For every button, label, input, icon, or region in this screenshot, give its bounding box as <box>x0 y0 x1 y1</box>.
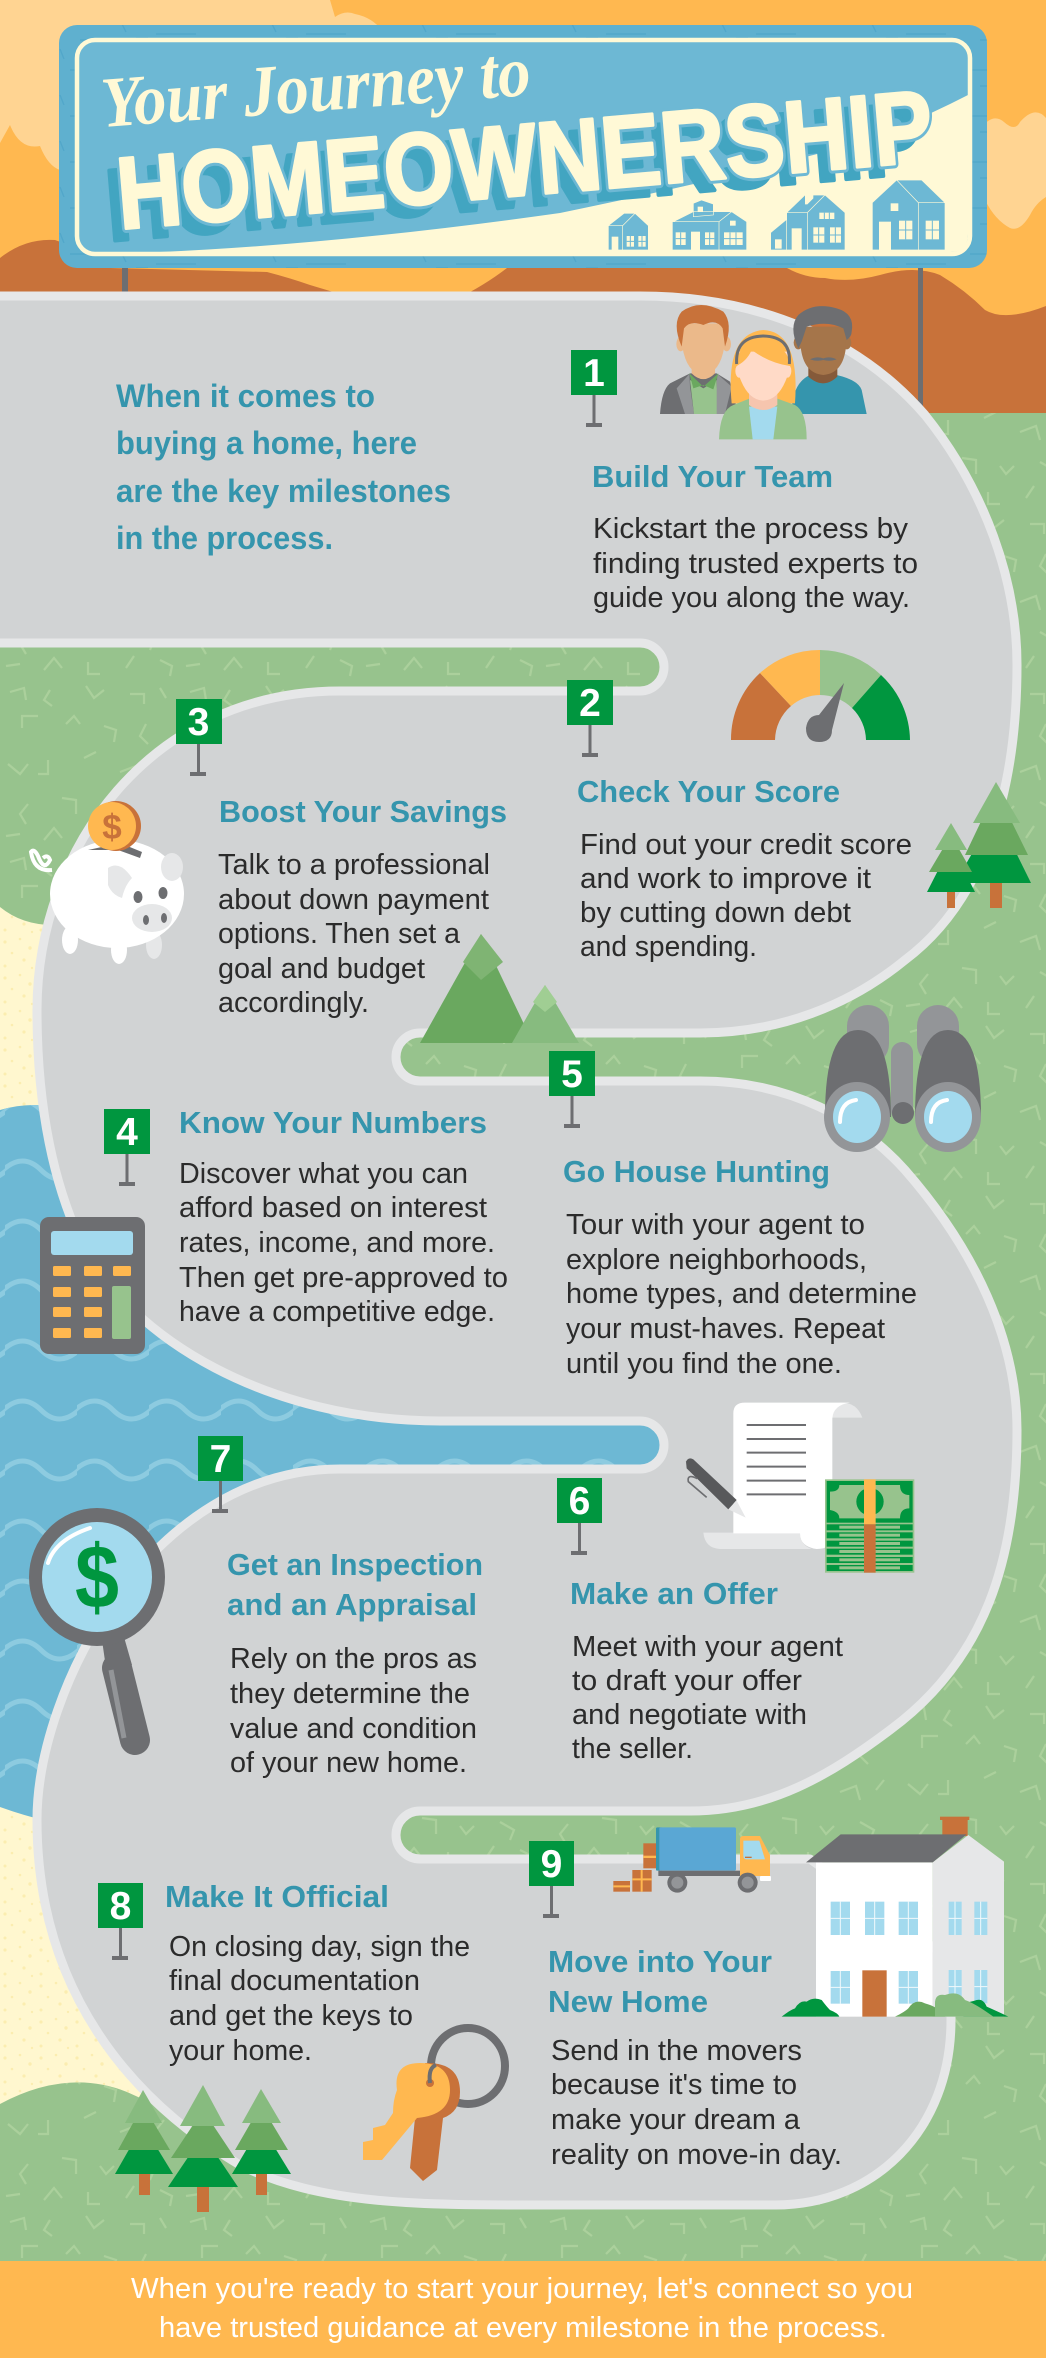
icon: mountains <box>420 934 579 1043</box>
title main word: HOMEOWNERSHIP <box>112 69 937 251</box>
heading: New Home <box>548 1984 708 2019</box>
marker 1 <box>571 350 617 427</box>
icon: calculator <box>40 1217 145 1354</box>
body text: because it's time to <box>551 2069 797 2101</box>
step 4: know your numbers <box>40 1105 508 1354</box>
marker 5 <box>549 1051 595 1128</box>
step 7: get an inspection and an appraisal <box>29 1436 483 1779</box>
icon: team of three people <box>660 305 867 439</box>
body text: and spending. <box>580 931 757 963</box>
body text: have a competitive edge. <box>179 1296 495 1328</box>
icon: piggy bank with coin: $ <box>102 808 122 847</box>
marker 5: 5 <box>561 1053 583 1096</box>
title main word: HOMEOWNERSHIP <box>101 81 926 263</box>
body text: to draft your offer <box>572 1665 802 1697</box>
intro text: When it comes to <box>116 378 375 414</box>
icon: new house <box>782 1817 1008 2017</box>
step 6: make an offer <box>557 1403 914 1765</box>
marker 9: 9 <box>541 1843 562 1886</box>
background: water <box>0 1105 700 1830</box>
body text: finding trusted experts to <box>593 548 918 580</box>
step 9: move into your new home <box>529 1817 1008 2171</box>
body text <box>580 829 912 963</box>
body text: Then get pre-approved to <box>179 1262 508 1294</box>
heading: Check Your Score <box>577 774 840 809</box>
title script line: Your Journey to <box>98 31 533 143</box>
icon: magnifying glass with dollar: $ <box>75 1528 119 1628</box>
marker 4 <box>104 1109 150 1186</box>
body text: value and condition <box>230 1713 477 1745</box>
icon: magnifying glass with dollar <box>29 1508 165 1740</box>
background: clouds <box>0 0 1046 229</box>
marker 2 <box>567 680 613 757</box>
body text <box>179 1158 508 1328</box>
body text: make your dream a <box>551 2104 801 2136</box>
body text <box>566 1209 917 1380</box>
step 2: check your score <box>567 650 1031 963</box>
body text <box>218 849 490 1019</box>
heading: Know Your Numbers <box>179 1105 487 1140</box>
body text: by cutting down debt <box>580 897 851 929</box>
step 8: make it official <box>98 1879 505 2212</box>
heading <box>548 1944 772 2019</box>
background: grass <box>0 413 1046 2263</box>
title billboard <box>59 25 987 268</box>
heading: Move into Your <box>548 1944 772 1979</box>
background: orange hills <box>0 240 1046 420</box>
body text: afford based on interest <box>179 1192 487 1224</box>
body text: the seller. <box>572 1733 693 1765</box>
intro text: buying a home, here <box>116 425 417 461</box>
title main word: HOMEOWNERSHIP <box>112 69 937 251</box>
marker 8 <box>98 1883 143 1960</box>
body text <box>572 1631 843 1765</box>
body text <box>169 1931 470 2067</box>
body text: rates, income, and more. <box>179 1227 495 1259</box>
body text: and work to improve it <box>580 863 871 895</box>
footer text: have trusted guidance at every milestone in the process. <box>159 2312 887 2344</box>
body text <box>230 1643 477 1779</box>
background: sand <box>0 907 200 2125</box>
body text: your home. <box>169 2035 312 2067</box>
marker 7: 7 <box>210 1438 231 1481</box>
background: sky <box>0 0 1046 420</box>
body text: Find out your credit score <box>580 829 912 861</box>
marker 2: 2 <box>579 682 601 725</box>
body text: and negotiate with <box>572 1699 807 1731</box>
icon: row of houses <box>608 180 945 250</box>
marker 7 <box>198 1436 243 1513</box>
body text: explore neighborhoods, <box>566 1244 867 1276</box>
body text <box>593 513 918 614</box>
body text: reality on move-in day. <box>551 2139 842 2171</box>
marker 8: 8 <box>110 1885 131 1928</box>
heading <box>227 1547 483 1622</box>
step 1: build your team <box>571 305 918 614</box>
footer band <box>0 2261 1046 2358</box>
marker 9 <box>529 1841 574 1918</box>
body text: accordingly. <box>218 987 369 1019</box>
heading: and an Appraisal <box>227 1587 477 1622</box>
footer text: When you're ready to start your journey, let's connect so you <box>131 2273 913 2305</box>
icon: three pine trees <box>115 2085 291 2212</box>
heading: Get an Inspection <box>227 1547 483 1582</box>
body text: your must-haves. Repeat <box>566 1313 885 1345</box>
heading: Go House Hunting <box>563 1154 830 1189</box>
body text: goal and budget <box>218 953 425 985</box>
heading: Make It Official <box>165 1879 389 1914</box>
heading: Make an Offer <box>570 1576 778 1611</box>
icon: contract, pen and money <box>686 1403 914 1573</box>
body text: until you find the one. <box>566 1348 842 1380</box>
step 3: boost your savings <box>31 699 579 1043</box>
body text: Kickstart the process by <box>593 513 909 545</box>
body text: home types, and determine <box>566 1278 917 1310</box>
body text: Rely on the pros as <box>230 1643 477 1675</box>
body text: about down payment <box>218 884 489 916</box>
winding road <box>0 296 1017 2205</box>
icon: credit score gauge <box>731 650 910 742</box>
body text <box>551 2035 842 2171</box>
body text: Talk to a professional <box>218 849 490 881</box>
intro text <box>116 378 451 556</box>
icon: moving truck and boxes <box>613 1827 771 1893</box>
body text: Tour with your agent to <box>566 1209 865 1241</box>
footer text <box>131 2273 913 2344</box>
body text: final documentation <box>169 1965 420 1997</box>
marker 4: 4 <box>116 1111 138 1154</box>
body text: Send in the movers <box>551 2035 802 2067</box>
body text: On closing day, sign the <box>169 1931 470 1963</box>
body text: guide you along the way. <box>593 582 910 614</box>
marker 3: 3 <box>188 701 209 744</box>
body text: options. Then set a <box>218 918 461 950</box>
heading: Boost Your Savings <box>219 794 507 829</box>
icon: piggy bank with coin <box>31 801 184 964</box>
body text: and get the keys to <box>169 2000 413 2032</box>
intro text: in the process. <box>116 520 333 556</box>
marker 1: 1 <box>583 352 605 395</box>
heading: Build Your Team <box>592 459 833 494</box>
icon: house keys <box>363 2028 505 2181</box>
marker 3 <box>176 699 222 776</box>
body text: Discover what you can <box>179 1158 468 1190</box>
icon: binoculars <box>824 1005 981 1152</box>
sign posts <box>122 266 923 416</box>
intro text: are the key milestones <box>116 473 451 509</box>
marker 6 <box>557 1478 602 1555</box>
body text: they determine the <box>230 1678 470 1710</box>
marker 6: 6 <box>569 1480 590 1523</box>
icon: pine trees <box>927 782 1031 908</box>
body text: Meet with your agent <box>572 1631 843 1663</box>
step 5: go house hunting <box>549 1005 981 1380</box>
body text: of your new home. <box>230 1747 467 1779</box>
